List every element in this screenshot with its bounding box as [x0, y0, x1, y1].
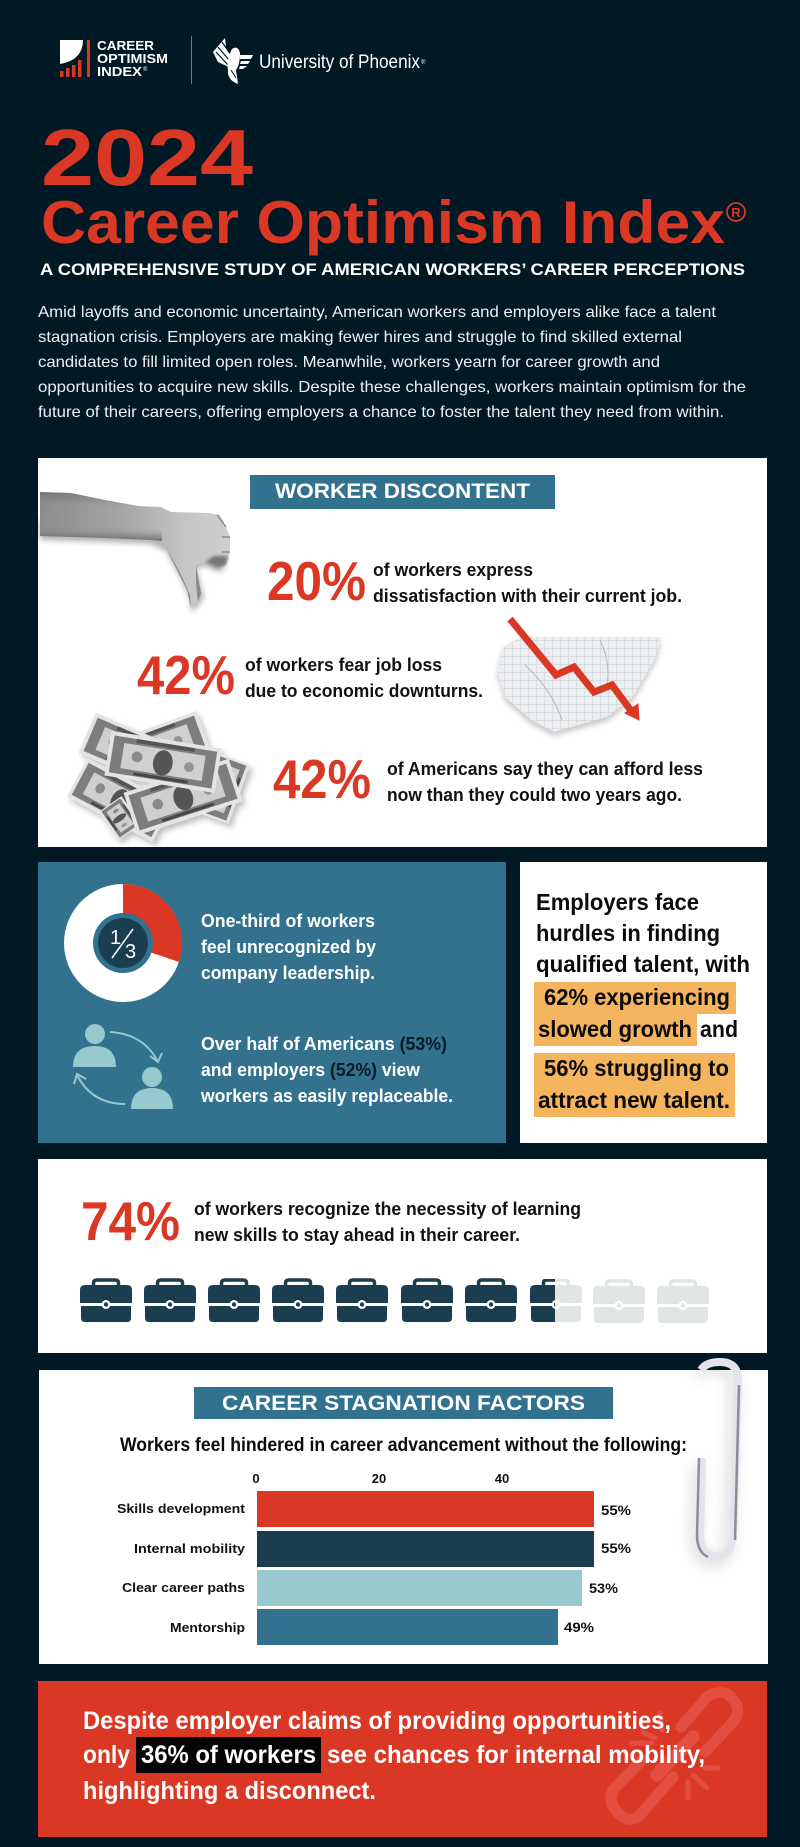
chart: one-third donut: 3	[125, 941, 136, 963]
text: employers: attract new talent.	[538, 1087, 730, 1113]
text: one-third of workers: feel unrecognized by	[201, 937, 376, 957]
text: despite employer claims: 36% of workers	[141, 1741, 316, 1769]
chart: stagnation factors: 0	[252, 1471, 260, 1486]
chart: stagnation factors	[117, 1471, 632, 1645]
chart: one-third donut: 1	[110, 927, 121, 949]
logo: University of Phoenix: ®	[421, 59, 426, 66]
text: chart intro: Workers feel hindered in career advancement without the following:	[120, 1435, 687, 1456]
panel: disconnect callout	[38, 1681, 767, 1837]
text: employers: hurdles in finding	[536, 920, 720, 946]
text: employers	[536, 889, 750, 1113]
stat: 42% job loss: due to economic downturns.	[245, 681, 483, 701]
logo: Career Optimism Index	[60, 38, 168, 79]
text: employers: 62% experiencing	[544, 984, 730, 1010]
stat: 42% job loss	[137, 644, 483, 706]
text: employers: slowed growth	[538, 1016, 692, 1042]
intro paragraph: opportunities to acquire new skills. Despite these challenges, workers maintain optimism for the	[38, 379, 746, 396]
icon: dollar bills	[67, 711, 250, 842]
text: employers: qualified talent, with	[536, 951, 750, 977]
title: Career Optimism Index: R	[731, 205, 741, 220]
intro paragraph	[38, 304, 746, 421]
chart: one-third donut	[64, 884, 182, 1002]
text: despite employer claims: only	[83, 1741, 130, 1769]
chart: stagnation factors: Internal mobility	[134, 1541, 246, 1556]
icon row: briefcases 74%	[80, 1280, 709, 1323]
stat: 20%: 20%	[267, 550, 366, 612]
text: employers: Employers face	[536, 889, 699, 915]
chart: stagnation factors: Skills development	[117, 1501, 246, 1516]
panel: learning new skills	[38, 1159, 767, 1353]
chart: stagnation factors: 40	[495, 1471, 509, 1486]
stat: 74%: of workers recognize the necessity of learning	[194, 1199, 581, 1219]
icon: broken chain	[611, 1692, 738, 1819]
stat: 42% afford less: now than they could two years ago.	[387, 785, 682, 805]
panel: employers face hurdles	[520, 862, 767, 1143]
panel: career stagnation factors	[39, 1370, 768, 1664]
logo: Career Optimism Index: INDEX	[97, 64, 142, 79]
text: one-third of workers: One-third of workers	[201, 911, 375, 931]
stat: 20%: dissatisfaction with their current job.	[373, 586, 682, 606]
logo: University of Phoenix: University of Phoenix	[259, 52, 420, 73]
logo: University of Phoenix	[213, 38, 426, 84]
chart: stagnation factors: 20	[372, 1471, 386, 1486]
chart: stagnation factors: 49%	[564, 1619, 595, 1635]
stat: 74%: new skills to stay ahead in their career.	[194, 1225, 520, 1245]
text: employers: 56% struggling to	[544, 1055, 729, 1081]
icon: paperclip	[696, 1362, 739, 1562]
intro paragraph: candidates to fill limited open roles. Meanwhile, workers yearn for career growth and	[38, 354, 660, 371]
intro paragraph: Amid layoffs and economic uncertainty, American workers and employers alike face a talent	[38, 304, 717, 321]
stat: 42% job loss: 42%	[137, 644, 235, 706]
text: replaceable workers	[200, 1034, 453, 1106]
logo: Career Optimism Index: CAREER	[97, 38, 155, 53]
text: replaceable workers: and employers (52%) view	[201, 1060, 421, 1080]
text: one-third of workers	[201, 911, 376, 983]
stat: 74%: 74%	[81, 1190, 180, 1252]
text: despite employer claims: highlighting a disconnect.	[83, 1777, 376, 1805]
intro paragraph: stagnation crisis. Employers are making fewer hires and struggle to find skilled external	[38, 329, 682, 346]
logo: Career Optimism Index: OPTIMISM	[97, 51, 168, 66]
icon: falling chart on torn graph paper	[497, 619, 661, 736]
heading: career stagnation factors	[194, 1387, 613, 1419]
highlights	[534, 982, 736, 1117]
stat: 74%	[81, 1190, 581, 1252]
logo: Career Optimism Index: ®	[143, 66, 148, 73]
icon: phoenix	[213, 38, 253, 84]
intro paragraph: future of their careers, offering employers a chance to foster the talent they need from within.	[38, 404, 724, 421]
chart: stagnation factors: 53%	[589, 1580, 619, 1596]
stat: 42% afford less	[273, 748, 703, 810]
text: employers: and	[700, 1016, 738, 1042]
text: despite employer claims: see chances for internal mobility,	[327, 1741, 705, 1769]
text: despite employer claims	[83, 1707, 705, 1805]
text: replaceable workers: workers as easily replaceable.	[200, 1086, 453, 1106]
icon: thumbs down hand	[40, 492, 230, 612]
stat: 42% afford less: of Americans say they can afford less	[387, 759, 703, 779]
text: despite employer claims: Despite employer claims of providing opportunities,	[83, 1707, 671, 1735]
chart: stagnation factors: 55%	[601, 1540, 632, 1556]
divider	[191, 36, 192, 84]
heading: career stagnation factors: CAREER STAGNATION FACTORS	[222, 1392, 585, 1415]
heading: worker discontent	[250, 475, 555, 509]
subtitle: A COMPREHENSIVE STUDY OF AMERICAN WORKERS’ CAREER PERCEPTIONS	[40, 260, 745, 279]
panel: recognition and replaceability	[38, 862, 506, 1143]
chart: stagnation factors: Clear career paths	[122, 1580, 245, 1595]
heading: worker discontent: WORKER DISCONTENT	[275, 480, 530, 503]
stat: 42% afford less: 42%	[273, 748, 371, 810]
title: 2024: 2024	[41, 113, 254, 202]
chart: stagnation factors: Mentorship	[170, 1620, 245, 1635]
panel: worker discontent	[38, 458, 767, 847]
text: one-third of workers: company leadership.	[201, 963, 375, 983]
title: Career Optimism Index: Career Optimism Index	[41, 189, 725, 256]
stat: 42% job loss: of workers fear job loss	[245, 655, 442, 675]
icon: people replacing each other	[73, 1024, 173, 1109]
chart: stagnation factors: 55%	[601, 1502, 632, 1518]
stat: 20%: of workers express	[373, 560, 533, 580]
stat: 20%	[267, 550, 682, 612]
text: replaceable workers: Over half of Americans (53%)	[201, 1034, 447, 1054]
